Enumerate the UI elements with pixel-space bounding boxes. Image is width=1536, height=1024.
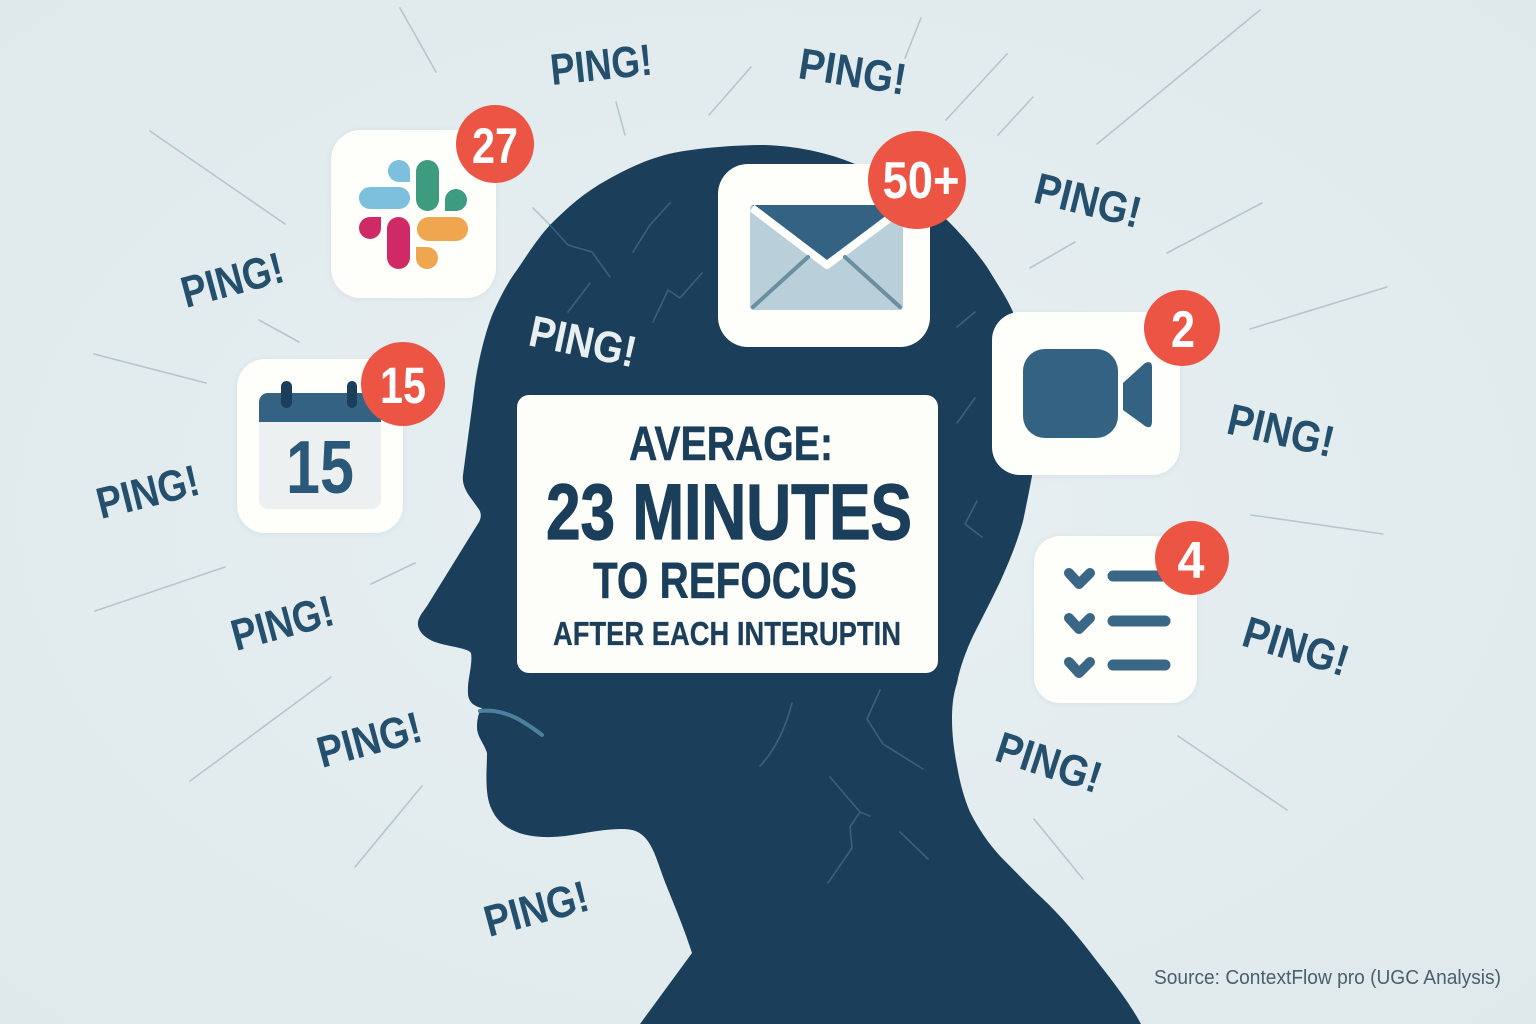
slack badge: 27	[472, 118, 518, 174]
calendar badge	[361, 342, 445, 426]
ping labels: PING!	[1223, 395, 1339, 467]
video app card	[992, 312, 1180, 475]
ping labels: PING!	[990, 723, 1108, 803]
source note: Source: ContextFlow pro (UGC Analysis)	[1154, 967, 1501, 989]
ping labels	[92, 36, 1355, 947]
tasks badge	[1155, 521, 1229, 595]
tasks badge: 4	[1178, 532, 1205, 590]
ping labels: PING!	[1237, 608, 1355, 686]
callout line: 23 minutes: 23 MINUTES	[546, 467, 912, 556]
ping labels: PING!	[1030, 164, 1146, 238]
calendar app card	[237, 359, 403, 533]
ping labels: PING!	[525, 307, 641, 377]
video badge: 2	[1171, 301, 1195, 359]
callout line: after each: AFTER EACH INTERUPTIN	[553, 615, 901, 652]
radiating lines	[94, 8, 1387, 879]
checklist icon	[1069, 573, 1165, 673]
ping labels: PING!	[479, 872, 594, 947]
head silhouette	[418, 145, 1141, 1024]
mail badge	[868, 131, 966, 229]
ping labels: PING!	[226, 586, 339, 661]
callout line: average: AVERAGE:	[629, 418, 833, 471]
ping labels: PING!	[312, 703, 427, 778]
tasks app card	[1034, 536, 1197, 703]
callout line: to refocus: TO REFOCUS	[593, 552, 857, 609]
mouth line	[480, 711, 542, 735]
mail app card	[718, 164, 930, 347]
slack logo	[359, 160, 468, 269]
ping labels: PING!	[548, 36, 654, 95]
calendar badge: 15	[380, 357, 426, 414]
calendar icon: 15	[286, 425, 354, 509]
ping labels: PING!	[795, 39, 910, 105]
head crack lines	[550, 203, 982, 883]
slack badge	[456, 105, 534, 183]
center callout	[517, 395, 938, 673]
ping labels: PING!	[92, 456, 204, 529]
calendar icon	[259, 381, 381, 509]
envelope icon	[750, 205, 903, 310]
ping labels: PING!	[176, 243, 289, 318]
slack app card	[331, 130, 496, 298]
video badge	[1144, 290, 1220, 366]
mail badge: 50+	[882, 152, 960, 210]
video camera icon	[1023, 349, 1152, 438]
